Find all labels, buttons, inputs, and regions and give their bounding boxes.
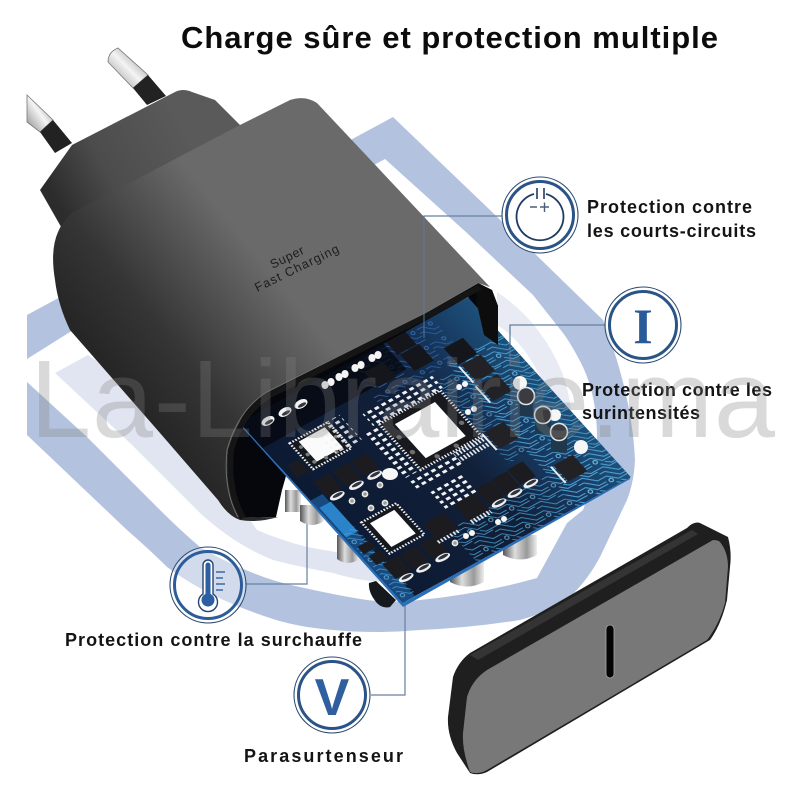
shield: pale right arc (497, 292, 572, 440)
label: surge protector: Parasurtenseur (244, 746, 403, 766)
connector lines (246, 216, 606, 695)
cap: front face (463, 540, 728, 773)
board: chip 3 (361, 503, 424, 554)
plug: base (40, 90, 260, 260)
board: white solder oval (382, 468, 398, 480)
plug: lower pin (27, 95, 72, 153)
plug: top pin (108, 48, 166, 105)
label: overheating protection: Protection contre la surchauffe (65, 630, 362, 650)
USB-C end cap (448, 523, 731, 774)
icon: overcurrent (605, 287, 681, 363)
icon: overheating (170, 547, 246, 623)
charger branding: Super (268, 243, 306, 272)
label: short circuit protection (587, 197, 756, 241)
rim: black frame right (476, 283, 498, 345)
charger plug (27, 48, 260, 260)
board: small left chips (285, 459, 389, 566)
board: chip 1 (290, 422, 351, 469)
cap: USB-C slot (606, 625, 614, 678)
rim: highlight (226, 283, 478, 517)
board: MOSFET row top (313, 453, 385, 503)
board: through-hole rings (349, 482, 458, 546)
icon: surge (294, 657, 370, 733)
icon: overcurrent: I (633, 298, 653, 354)
circuit board (240, 297, 631, 607)
blue shield background (27, 117, 635, 632)
board: top shadow (240, 344, 406, 448)
label: overcurrent protection (582, 380, 772, 423)
board: MOSFET row right (474, 461, 542, 510)
under-board capacitors (285, 490, 537, 586)
black side connector (369, 581, 396, 607)
charger branding: Fast Charging (252, 242, 341, 295)
board: edge thickness (240, 423, 630, 607)
re-drawn connector lines over charger (424, 216, 510, 365)
board: bright lower traces (448, 445, 631, 562)
shield: pale inner band (55, 355, 380, 582)
board: capacitors (518, 388, 568, 452)
cap: dark edge (448, 523, 731, 774)
board: white connector marks (260, 397, 309, 428)
label: short circuit protection: Protection contre (587, 197, 752, 217)
board: substrate (240, 297, 631, 603)
label: short circuit protection: les courts-circuits (587, 221, 756, 241)
board: mid traces (435, 368, 535, 463)
shield: main band (27, 117, 635, 632)
icon: surge: V (315, 669, 350, 727)
title: Charge sûre et protection multiple (181, 20, 718, 55)
charger body (53, 98, 490, 521)
board: upper dark chips (353, 313, 478, 402)
watermark: La-Librairie.ma (30, 338, 776, 461)
board: dim upper traces (344, 317, 465, 402)
label: overcurrent protection: Protection contre les (582, 380, 772, 400)
board: white solder dots (456, 376, 588, 539)
charger rim (226, 283, 498, 518)
board: components in board perspective (240, 297, 631, 603)
cap: edge highlight (470, 530, 698, 660)
board: bright right traces (448, 334, 631, 507)
board: power chips middle (420, 493, 493, 544)
icon: short circuit (502, 177, 578, 253)
board: light blue patch (319, 502, 358, 537)
board: MOSFET row bottom (382, 535, 453, 585)
rim: black edge (230, 287, 480, 518)
board: pad fields (313, 368, 519, 533)
board: white vias row (321, 351, 382, 389)
board: right chips (433, 354, 587, 498)
board: left blue strip (310, 494, 415, 603)
charger inner opening (227, 283, 498, 518)
board: left traces (342, 526, 415, 600)
board: main processor (379, 390, 482, 470)
label: overcurrent protection: surintensités (582, 403, 700, 423)
